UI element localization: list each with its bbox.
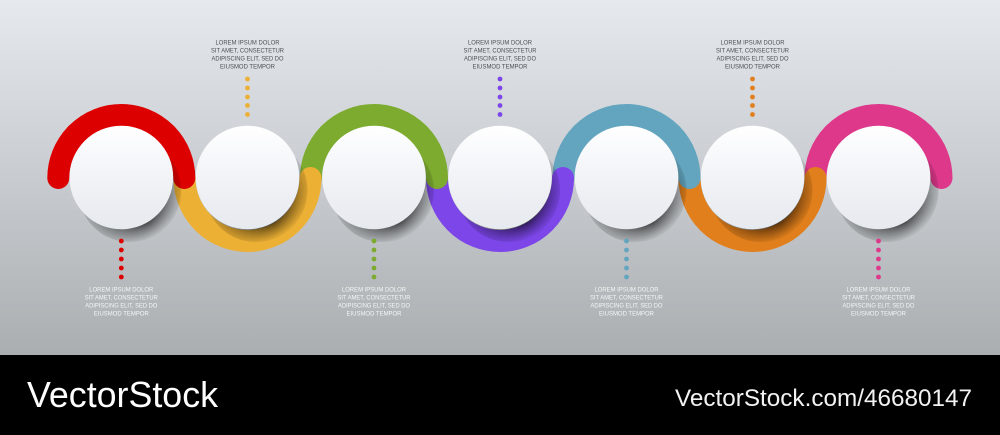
white discs: [70, 126, 930, 229]
arc 2: yellow: [184, 178, 310, 241]
dotted connector 4: purple: [498, 77, 502, 117]
text block 7: ADIPISCING ELIT, SED DO: [842, 302, 914, 309]
text block 6: SIT AMET, CONSECTETUR: [716, 47, 789, 54]
text block 1: SIT AMET, CONSECTETUR: [85, 294, 158, 301]
text block 1: LOREM IPSUM DOLOR: [89, 286, 154, 293]
text block 6: LOREM IPSUM DOLOR: [720, 39, 785, 46]
text block 5: LOREM IPSUM DOLOR: [594, 286, 659, 293]
dotted connector 3: green: [372, 239, 376, 279]
text block 7: SIT AMET, CONSECTETUR: [842, 294, 915, 301]
text block 5: ADIPISCING ELIT, SED DO: [590, 302, 662, 309]
text block 5: [590, 286, 663, 317]
footer logo wordmark: VectorStock: [27, 374, 219, 415]
text block 1: EIUSMOD TEMPOR: [94, 310, 149, 317]
text block 3: LOREM IPSUM DOLOR: [342, 286, 406, 293]
text block 6: ADIPISCING ELIT, SED DO: [716, 55, 788, 62]
arc 7: pink: [816, 115, 942, 178]
text block 3: SIT AMET, CONSECTETUR: [338, 294, 411, 301]
disc 7: [827, 126, 930, 229]
text block 5: SIT AMET, CONSECTETUR: [590, 294, 663, 301]
arc 1: red: [58, 115, 184, 178]
text block 7: EIUSMOD TEMPOR: [851, 310, 906, 317]
text block 4: [464, 39, 537, 70]
arc 6: orange: [690, 178, 816, 241]
text block 4: SIT AMET, CONSECTETUR: [464, 47, 537, 54]
text block 6: EIUSMOD TEMPOR: [725, 63, 780, 70]
text block 4: EIUSMOD TEMPOR: [472, 63, 528, 70]
footer image reference: VectorStock.com/46680147: [675, 385, 972, 412]
connected ring arcs: [58, 115, 942, 241]
text block 2: [211, 39, 284, 70]
text block 2: SIT AMET, CONSECTETUR: [211, 47, 284, 54]
text block 3: [338, 286, 411, 317]
text block 1: ADIPISCING ELIT, SED DO: [85, 302, 157, 309]
text block 2: EIUSMOD TEMPOR: [220, 63, 275, 70]
dotted connector 6: orange: [750, 77, 755, 117]
disc 3: [322, 126, 426, 229]
arc 4: purple: [437, 178, 563, 241]
disc 4: [448, 126, 552, 229]
text block 4: ADIPISCING ELIT, SED DO: [464, 55, 536, 62]
text block 1: [85, 286, 158, 317]
dotted connector 1: red: [119, 239, 124, 279]
text block 3: ADIPISCING ELIT, SED DO: [338, 302, 410, 309]
text block 2: ADIPISCING ELIT, SED DO: [212, 55, 284, 62]
disc 6: [701, 126, 804, 229]
text block 7: [842, 286, 915, 317]
arc 5: blue: [564, 115, 690, 178]
text block 6: [716, 39, 789, 70]
dotted connector 5: blue: [624, 239, 629, 279]
footer bar: [0, 355, 1000, 435]
disc drop shadows: [84, 158, 938, 242]
dotted connector 2: yellow: [245, 77, 250, 117]
disc 5: [575, 126, 678, 229]
disc 1: [70, 126, 173, 229]
text block 3: EIUSMOD TEMPOR: [346, 310, 402, 317]
disc 2: [196, 126, 299, 229]
arc 3: green: [311, 115, 437, 178]
text block 2: LOREM IPSUM DOLOR: [216, 39, 280, 46]
text block 4: LOREM IPSUM DOLOR: [468, 39, 532, 46]
dotted connector 7: pink: [876, 239, 881, 279]
text block 5: EIUSMOD TEMPOR: [599, 310, 654, 317]
text block 7: LOREM IPSUM DOLOR: [846, 286, 911, 293]
